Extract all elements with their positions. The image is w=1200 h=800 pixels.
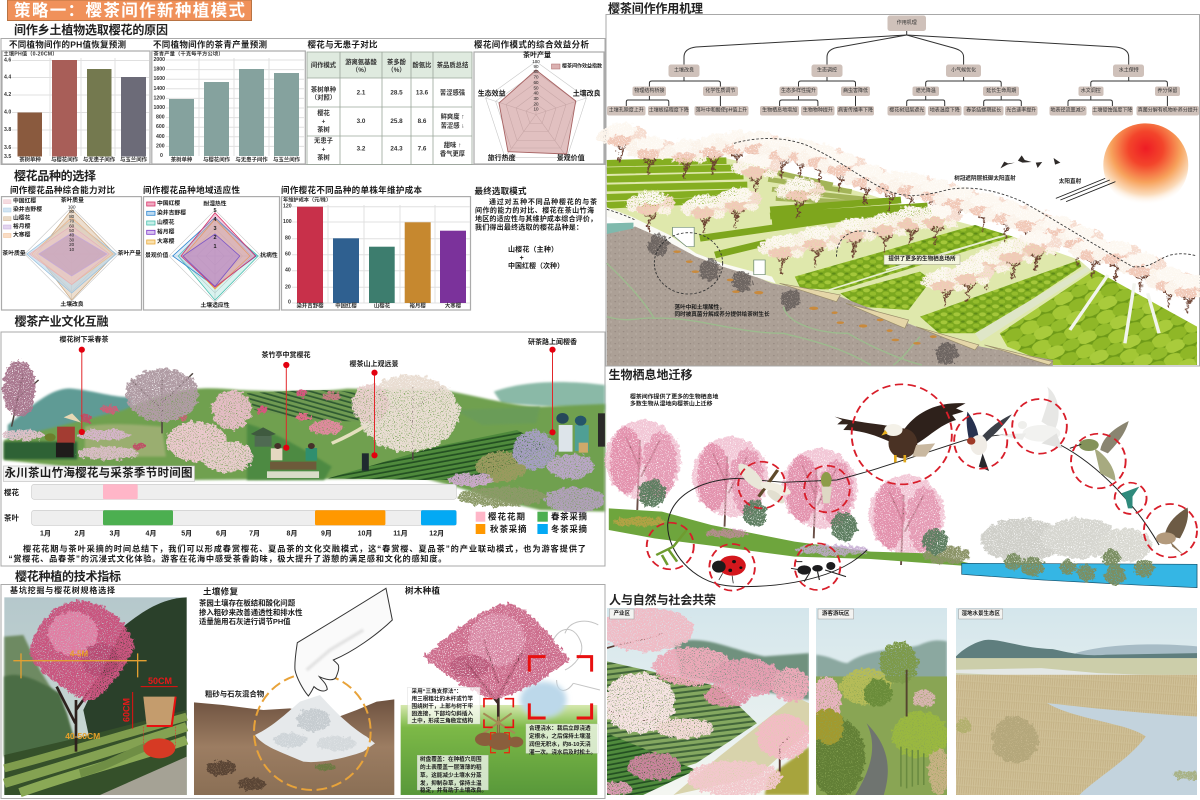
radar chart: overall benefit: 景观价值 [557, 153, 585, 162]
radar chart: variety ability comparison: 中国红樱 [13, 197, 36, 205]
radar chart: overall benefit: 100 [532, 59, 540, 64]
radar chart: regional adaptability [143, 185, 280, 310]
icon: ladybug [712, 556, 746, 583]
nodes: level one: 土壤改良 [674, 67, 694, 74]
people: tea pickers [556, 413, 605, 453]
note: mulching: 发，抑制杂草，保持土温 [420, 779, 482, 787]
text block: culture summary: “赏樱花、品春茶”的沉浸式文化体验。游客在花海中感受茶香韵味，极大提升了游憩的满足感和文化的感知度。 [8, 554, 446, 564]
callout: more habitats [884, 255, 960, 264]
callout pin: mountain viewpoint [350, 359, 398, 458]
text block: soil repair notes: 掺入粗砂来改善通透性和排水性 [199, 608, 303, 617]
bar chart: soil pH forecast: 土壤PH值（0-20CM） [4, 50, 58, 58]
radar chart: regional adaptability: 裕月樱 [157, 227, 175, 235]
table: cherry vs soapberry: + [322, 146, 326, 154]
table: cherry vs soapberry: （对照） [311, 92, 336, 102]
radar chart: variety ability comparison: 染井吉野樱 [13, 205, 42, 213]
weeping cherry trees [605, 420, 945, 565]
timeline chart: cherry bloom and tea picking: 2月 [75, 530, 85, 538]
bar chart: soil pH forecast: 与樱花间作 [51, 156, 79, 164]
radar chart: overall benefit: 80 [533, 69, 539, 74]
note: triangular support: 采用“三角支撑法”： [412, 687, 462, 695]
panorama illustration [2, 360, 605, 513]
note: triangular support: 用三根粗壮的木杆或竹竿 [412, 694, 473, 702]
timeline chart: cherry bloom and tea picking: 3月 [110, 530, 120, 538]
nodes: level three: 生物栖息地增加 [762, 107, 797, 114]
text block: final selected mode: 中国红樱（次种） [508, 261, 564, 270]
radar chart: overall benefit: 茶叶产量 [523, 50, 551, 59]
sub-panel: pit excavation specification: 基坑挖掘与樱花树规格选择 [10, 585, 115, 595]
text block: final selected mode: 通过对五种不同品种樱花的与茶 [489, 197, 597, 206]
text block: final selected mode: 间作的能力的对比、樱花在茶山竹海 [475, 206, 594, 214]
sub-panel: tree planting: 树木种植 [405, 586, 440, 596]
radar chart: overall benefit: 樱茶间作效益指数 [562, 62, 602, 70]
nodes: level two: 生态多样性提升 [781, 87, 816, 94]
note: mulching: 树盘覆盖：在种植穴周围 [420, 755, 482, 763]
sub-panel: pit excavation specification: 40-50CM [65, 731, 100, 741]
illustration: hand sprinkling sand onto soil [194, 588, 394, 795]
radar chart: overall benefit: 90 [533, 64, 539, 69]
heading: technical indicators: 樱花种植的技术指标 [15, 569, 121, 584]
bar chart: soil pH forecast: 3.8 [4, 127, 11, 133]
radar chart: variety ability comparison: 70 [69, 218, 75, 224]
bar chart: soil pH forecast: 4.4 [4, 74, 11, 80]
nodes: level three: 土壤板结程度下降 [649, 107, 689, 114]
callout pin: mountain viewpoint: 樱茶山上观远景 [350, 359, 398, 368]
note: watering: 灌一次。浇水后及时松土。 [529, 748, 596, 756]
table: cherry vs soapberry: 酚氨比 [413, 60, 432, 69]
wetland reeds and water [962, 518, 1197, 588]
bar chart: annual maintenance cost: 山樱花 [374, 302, 391, 310]
note: mulching: 草。这能减少土壤水分蒸 [420, 771, 482, 779]
note: watering: 合理浇水：栽后立即浇透 [529, 724, 591, 732]
illustration: habitat migration: 多数生物从湿地向樱茶山上迁移 [630, 400, 713, 408]
nodes: level three: 光合速率提升 [1006, 107, 1036, 114]
note: triangular support: 固连接，下部均匀斜插入 [412, 710, 473, 718]
radar chart: regional adaptability: 3 [213, 226, 217, 232]
bar chart: soil pH forecast: 4.2 [4, 92, 11, 98]
bar chart: tea yield forecast: 200 [156, 143, 165, 149]
nodes: level three: 落叶中和酸使pH值上升 [696, 107, 747, 114]
icon: dragonfly [734, 461, 793, 506]
fallen leaves [673, 250, 937, 345]
radar chart: variety ability comparison: 20 [69, 242, 75, 247]
table: cherry vs soapberry: 24.3 [390, 146, 403, 152]
table: cherry vs soapberry: 茶品质总结 [437, 60, 469, 69]
table: cherry vs soapberry: 苦涩感强 [440, 88, 466, 96]
nodes: level one: 水土保持 [1119, 67, 1139, 74]
bar chart: annual maintenance cost: 间作樱花不同品种的单株年维护成本 [281, 185, 422, 195]
radar chart: variety ability comparison: 间作樱花品种综合能力对比 [10, 185, 115, 195]
bar chart: tea yield forecast: 1400 [154, 86, 165, 92]
table: cherry vs soapberry: 3.0 [357, 118, 366, 125]
node: root: 作用机理 [897, 19, 917, 26]
text block: soil repair notes: 适量施用石灰进行调节PH值 [199, 617, 291, 626]
icon: sun [1103, 123, 1188, 207]
note: triangular support [412, 687, 473, 724]
radar chart: variety ability comparison: 40 [69, 233, 75, 238]
heading: cherry variety selection: 樱花品种的选择 [14, 168, 96, 183]
heading: why cherry: 间作乡土植物选取樱花的原因 [14, 22, 168, 37]
photo: visitor zone: 游客游玩区 [822, 609, 850, 617]
bar chart: tea yield forecast: 0 [160, 153, 163, 159]
radar chart: overall benefit [474, 40, 604, 164]
callout: more habitats: 提供了更多的生物栖息场所 [888, 255, 956, 263]
icon: hummingbird [1070, 421, 1129, 481]
icon: eagle [835, 403, 966, 462]
bar chart: annual maintenance cost [281, 185, 470, 310]
radar chart: overall benefit: 40 [533, 90, 539, 96]
table: cherry vs soapberry: 28.5 [390, 90, 403, 96]
table: cherry vs soapberry: 樱花与无患子对比 [308, 40, 378, 50]
timeline chart: cherry bloom and tea picking: 茶叶 [4, 512, 19, 522]
nodes: level one [668, 64, 1144, 77]
bushes [640, 479, 948, 554]
table: cherry vs soapberry [307, 40, 472, 164]
timeline chart: cherry bloom and tea picking: 1月 [40, 530, 51, 538]
callout pin: pavilion viewing: 茶竹亭中赏樱花 [262, 350, 310, 359]
bar chart: soil pH forecast: 4.6 [4, 58, 11, 64]
pavilion [251, 427, 276, 447]
bar chart: tea yield forecast: 茶树单种 [171, 156, 193, 164]
radar chart: regional adaptability: 4 [213, 217, 217, 223]
photo: cherry tree on tea slope [4, 597, 187, 795]
table: cherry vs soapberry: 茶树 [317, 152, 330, 162]
text block: final selected mode: + [520, 255, 524, 262]
icon: cicada [821, 472, 832, 503]
radar chart: regional adaptability: 间作樱花品种地域适应性 [143, 185, 240, 195]
bar chart: tea yield forecast: 与樱花间作 [203, 156, 231, 164]
bar chart: annual maintenance cost: 裕月樱 [410, 302, 426, 310]
nodes: level three: 生物物种提升 [803, 107, 833, 114]
bar chart: soil pH forecast: 与无患子间作 [83, 156, 116, 164]
table: cherry vs soapberry: 8.6 [418, 118, 427, 125]
radar chart: regional adaptability: 土壤适应性 [200, 301, 230, 309]
radar chart: variety ability comparison: 30 [69, 237, 75, 242]
photo: wetland zone: 湿地水景生态区 [961, 609, 1000, 617]
bar chart: soil pH forecast: 3.6 [4, 145, 11, 151]
table: cherry vs soapberry: 3.2 [357, 146, 366, 152]
photo: industry zone [599, 608, 810, 796]
radar chart: overall benefit: 50 [533, 86, 539, 90]
table: cherry vs soapberry: 7.6 [418, 146, 427, 152]
bar chart: annual maintenance cost: 中国红樱 [335, 302, 357, 310]
bar chart: tea yield forecast: 1000 [154, 105, 165, 111]
photo: visitor zone [811, 608, 950, 798]
radar chart: variety ability comparison: 10 [69, 247, 75, 252]
radar chart: regional adaptability: 2 [213, 235, 217, 241]
icon: flying birds [1000, 155, 1060, 168]
text block: final selected mode: 最终选取模式 [474, 186, 527, 196]
icon: white dove [996, 387, 1062, 448]
heading: habitat migration: 生物栖息地迁移 [608, 367, 692, 382]
text block: culture summary: 樱花花期与茶叶采摘的时间总结下，我们可以形成春赏樱花、夏品茶的文化交融模式，这“春赏樱、夏品茶”的产业联动模式，也为游客提供了 [23, 544, 586, 554]
timeline chart: cherry bloom and tea picking: 4月 [146, 530, 156, 538]
timeline chart: cherry bloom and tea picking: 11月 [393, 530, 408, 538]
people: seated tea drinkers [267, 443, 319, 478]
radar chart: variety ability comparison: 80 [69, 214, 75, 219]
radar chart: variety ability comparison: 60 [69, 223, 75, 228]
table: cherry vs soapberry: 苦涩感 ↓ [441, 120, 464, 130]
nodes: level two [632, 86, 1180, 96]
photo: wetland zone [956, 608, 1197, 795]
timeline chart: cherry bloom and tea picking: 8月 [287, 530, 297, 538]
bar chart: soil pH forecast: 3.5 [4, 154, 11, 160]
heading: tea industry culture: 樱茶产业文化互融 [14, 314, 108, 328]
nodes: level three [607, 106, 1199, 116]
bar chart: tea yield forecast: 1200 [154, 95, 165, 101]
sub-panel: pit excavation specification [4, 585, 187, 795]
sub-panel: soil repair: 土壤修复 [203, 587, 238, 597]
radar chart: regional adaptability: 1 [213, 244, 217, 250]
callout pin: tea road [528, 337, 577, 435]
text block: final selected mode: 地区的适应性与其维护成本综合评价， [475, 214, 597, 223]
sub-panel: pit excavation specification: 60CM [122, 698, 132, 722]
nodes: level three: 土壤侵蚀强度下降 [1092, 107, 1132, 114]
nodes: level two: 水文调控 [1081, 87, 1101, 94]
callout: direct sunlight: 太阳直射 [1059, 177, 1082, 185]
radar chart: variety ability comparison: 90 [69, 209, 75, 214]
radar chart: regional adaptability: 5 [213, 208, 217, 214]
table: cherry vs soapberry: 茶树单种 [311, 84, 336, 94]
radar chart: regional adaptability: 景观价值 [145, 251, 168, 259]
note: triangular support: 土中，形成三角稳定结构 [412, 716, 473, 724]
node: root [888, 16, 926, 31]
nodes: level two: 养分保留 [1157, 87, 1177, 94]
bar chart: annual maintenance cost: 染井吉野樱 [297, 302, 324, 310]
radar chart: overall benefit: 樱花间作模式的综合效益分析 [474, 40, 589, 50]
callout pin: spring tea picking [60, 334, 108, 435]
nodes: level one: 小气候优化 [951, 67, 976, 74]
bar chart: soil pH forecast: 与玉兰间作 [120, 156, 148, 164]
nodes: level two: 化学性质调节 [705, 87, 735, 94]
callout: soil acid: 落叶中和土壤酸性， [674, 303, 725, 311]
legend: 春茶采摘 [551, 512, 587, 522]
note: mulching [420, 755, 487, 794]
note: mulching: 的土表覆盖一层薄薄的稻 [420, 763, 482, 771]
bar chart: tea yield forecast: 2000 [154, 57, 165, 63]
nodes: level one: 生态调控 [817, 67, 837, 74]
timeline chart: cherry bloom and tea picking: 永川茶山竹海樱花与采茶季节时间图 [4, 466, 192, 480]
note: watering: 润但无积水，约8-10天浇 [529, 740, 591, 748]
table: cherry vs soapberry: 茶树 [317, 124, 330, 134]
illustration: habitat migration: 樱茶间作提供了更多的生物栖息地 [630, 393, 718, 401]
table: cherry vs soapberry: 樱花 [317, 108, 330, 117]
callout pin: spring tea picking: 樱花树下采春茶 [60, 334, 108, 344]
heading: human nature society: 人与自然与社会共荣 [609, 592, 716, 607]
table: cherry vs soapberry: 间作模式 [311, 60, 337, 69]
nodes: level three: 地表径流量减少 [1050, 107, 1086, 114]
radar chart: variety ability comparison: 茶叶产量 [118, 249, 141, 257]
bar chart: soil pH forecast: 不同植物间作的PH值恢复预测 [9, 40, 126, 50]
bar chart: annual maintenance cost: 80 [285, 236, 291, 242]
sub-panel: tree planting [401, 586, 600, 795]
table: cherry vs soapberry: 香气更厚 [440, 148, 466, 158]
callout pin: pavilion viewing [262, 350, 310, 451]
bar chart: tea yield forecast: 400 [156, 134, 165, 140]
bar chart: tea yield forecast [152, 40, 305, 164]
icon: swallow [967, 412, 1012, 471]
radar chart: variety ability comparison: 土壤改良 [60, 300, 84, 308]
radar chart: overall benefit: 30 [533, 96, 539, 101]
bar chart: annual maintenance cost: 60 [285, 252, 291, 258]
nodes: level three: 春茶结螺期延长 [966, 107, 1001, 114]
radar chart: variety ability comparison: 山樱花 [13, 214, 31, 222]
illustration: cherry tree, stakes, and watering can [401, 603, 600, 795]
red dashed highlight circles [647, 384, 1197, 591]
title banner: 策略一：樱茶间作新种植模式 [14, 0, 246, 20]
timeline chart: cherry bloom and tea picking: 10月 [358, 530, 372, 538]
bar chart: annual maintenance cost: 大寒樱 [445, 302, 462, 310]
table: cherry vs soapberry: 无患子 [314, 136, 334, 144]
legend: 樱花花期 [488, 512, 525, 522]
tree diagram: mechanism [607, 16, 1199, 116]
table: cherry vs soapberry: 鲜爽度 ↑ [441, 112, 464, 120]
meadow and flower strip [609, 508, 977, 566]
table: cherry vs soapberry: 25.8 [390, 118, 403, 125]
timeline chart: cherry bloom and tea picking: 5月 [181, 530, 192, 538]
note: mulching: 稳定，并有助于土壤改良。 [420, 786, 487, 794]
sub-panel: pit excavation specification: 4-5M [70, 650, 88, 658]
nodes: level two: 遮光降温 [916, 87, 936, 94]
nodes: level two: 病虫害降低 [843, 87, 868, 94]
panel: mechanism tree and terrace section [597, 14, 1200, 366]
text block: final selected mode [474, 186, 597, 270]
panel: industry culture and timeline [1, 332, 605, 566]
table: cherry vs soapberry: 茶多酚 [387, 57, 407, 66]
table: cherry vs soapberry: 游离氨基酸 [345, 57, 377, 66]
text block: culture summary [8, 544, 586, 564]
callout pin: tea road: 研茶路上闻樱香 [528, 337, 577, 346]
radar chart: variety ability comparison: 裕月樱 [13, 222, 31, 230]
bar chart: annual maintenance cost: 20 [285, 284, 291, 290]
nodes: level three: 樱花树冠层遮光 [889, 107, 924, 114]
bar chart: tea yield forecast: 不同植物间作的茶青产量预测 [153, 40, 267, 50]
bar chart: tea yield forecast: 与无患子间作 [235, 156, 268, 164]
nodes: level two: 延长生命周期 [986, 87, 1016, 94]
timeline chart: cherry bloom and tea picking: 6月 [216, 530, 227, 538]
nodes: level three: 土壤孔隙度上升 [609, 107, 644, 114]
timeline chart: cherry bloom and tea picking: 樱花 [4, 487, 19, 497]
table: cherry vs soapberry: （%） [387, 66, 406, 74]
sub-panel: soil repair [194, 587, 394, 795]
icon: mantis [656, 530, 687, 565]
sub-panel: pit excavation specification: 50CM [148, 676, 172, 686]
radar chart: variety ability comparison [2, 185, 142, 310]
note: triangular support: 围绕树干，上部与树干牢 [412, 702, 473, 710]
bar chart: annual maintenance cost: 120 [283, 204, 292, 210]
nodes: level three: 真菌分解有机物补养分提升 [1138, 107, 1198, 114]
bar chart: tea yield forecast: 与玉兰间作 [273, 156, 301, 164]
callout: shade layer: 树冠遮阴层抵御太阳直射 [954, 174, 1016, 182]
legend: 冬茶采摘 [551, 524, 587, 534]
photo strip: three zones [599, 608, 1197, 798]
radar chart: regional adaptability: 大寒樱 [157, 237, 175, 245]
radar chart: overall benefit: 70 [533, 74, 539, 80]
bar chart: annual maintenance cost: 0 [288, 300, 291, 306]
bar chart: soil pH forecast: 4.0 [4, 110, 11, 116]
text block: soil repair notes [199, 598, 303, 626]
radar chart: overall benefit: 20 [533, 102, 539, 106]
radar chart: overall benefit: 60 [533, 80, 539, 85]
radar chart: variety ability comparison: 茶叶质量 [61, 196, 84, 204]
heading: mechanism: 樱茶间作作用机理 [608, 0, 703, 16]
timeline chart: cherry bloom and tea picking [4, 466, 456, 538]
radar chart: variety ability comparison: 50 [69, 228, 75, 233]
nodes: level three: 病害传播率下降 [838, 107, 873, 114]
illustration: habitat migration [605, 384, 1197, 591]
bar chart: tea yield forecast: 800 [156, 115, 165, 121]
note: watering: 定根水，之后保持土壤湿 [529, 732, 591, 740]
text block: final selected mode: 我们得出最终选取的樱花品种是： [475, 222, 583, 232]
timeline chart: cherry bloom and tea picking: 12月 [429, 530, 444, 538]
radar chart: variety ability comparison: 100 [68, 204, 76, 210]
table: cherry vs soapberry: 2.1 [357, 90, 366, 96]
radar chart: variety ability comparison: 茶叶质量 [2, 249, 26, 257]
icon: small teal bird [1121, 487, 1139, 508]
callout: soil acid: 同时被真菌分解成养分提供给茶树生长 [674, 310, 770, 318]
radar chart: overall benefit: 生态效益 [478, 88, 506, 98]
tree roots [648, 234, 957, 364]
people: tea picker with hat [45, 413, 81, 457]
illustration: terraced tea and cherry section [597, 123, 1200, 366]
photo: industry zone: 产业区 [613, 609, 630, 617]
radar chart: overall benefit: 土壤改良 [573, 88, 601, 98]
bar chart: annual maintenance cost: 100 [283, 219, 292, 225]
sub-panel: soil repair: 粗砂与石灰混合物 [205, 690, 265, 698]
legend [476, 512, 587, 534]
table: cherry vs soapberry: （%） [352, 66, 370, 74]
icon: sparrow [1156, 508, 1188, 555]
radar chart: overall benefit: 10 [533, 106, 539, 112]
panel: planting technical indicators [1, 584, 605, 798]
bar chart: tea yield forecast: 1800 [154, 67, 165, 73]
arrows: direct sunlight [1056, 178, 1115, 202]
icon: ant [791, 562, 846, 582]
radar chart: regional adaptability: 中国红樱 [157, 199, 180, 207]
note: watering [529, 724, 596, 756]
legend: 秋茶采摘 [490, 524, 527, 534]
cherry trees [597, 123, 1200, 314]
bar chart: tea yield forecast: 茶青产量（千克每平方公顷） [154, 50, 224, 58]
timeline chart: cherry bloom and tea picking: 7月 [249, 530, 260, 538]
panel: reasons for choosing cherry blossom [1, 38, 605, 164]
bar chart: annual maintenance cost: 年维护成本（元/株） [283, 196, 331, 204]
timeline chart: cherry bloom and tea picking: 9月 [321, 530, 332, 538]
bar chart: tea yield forecast: 1600 [154, 76, 165, 82]
nodes: level two: 物理结构桥接 [634, 87, 664, 94]
radar chart: regional adaptability: 染井吉野樱 [157, 208, 186, 216]
table: cherry vs soapberry: 13.6 [416, 90, 429, 96]
callout: soil acid [674, 303, 770, 318]
bar chart: soil pH forecast: 茶树单种 [19, 156, 41, 164]
bar chart: annual maintenance cost: 40 [285, 268, 291, 274]
text block: soil repair notes: 茶园土壤存在板结和酸化问题 [199, 598, 296, 608]
table: cherry vs soapberry: 甜味 ↑ [444, 140, 461, 149]
nodes: level three: 地表温度下降 [930, 107, 960, 114]
radar chart: variety ability comparison: 大寒樱 [13, 230, 31, 238]
table: cherry vs soapberry: + [322, 118, 326, 126]
text block: final selected mode: 山樱花（主种） [508, 244, 558, 254]
radar chart: regional adaptability: 抗病性 [260, 251, 278, 259]
bar chart: soil pH forecast [2, 40, 150, 164]
bar chart: tea yield forecast: 600 [156, 124, 165, 130]
radar chart: overall benefit: 旅行热度 [488, 153, 516, 162]
radar chart: regional adaptability: 山樱花 [157, 218, 175, 226]
radar chart: regional adaptability: 耐湿热性 [203, 199, 227, 207]
